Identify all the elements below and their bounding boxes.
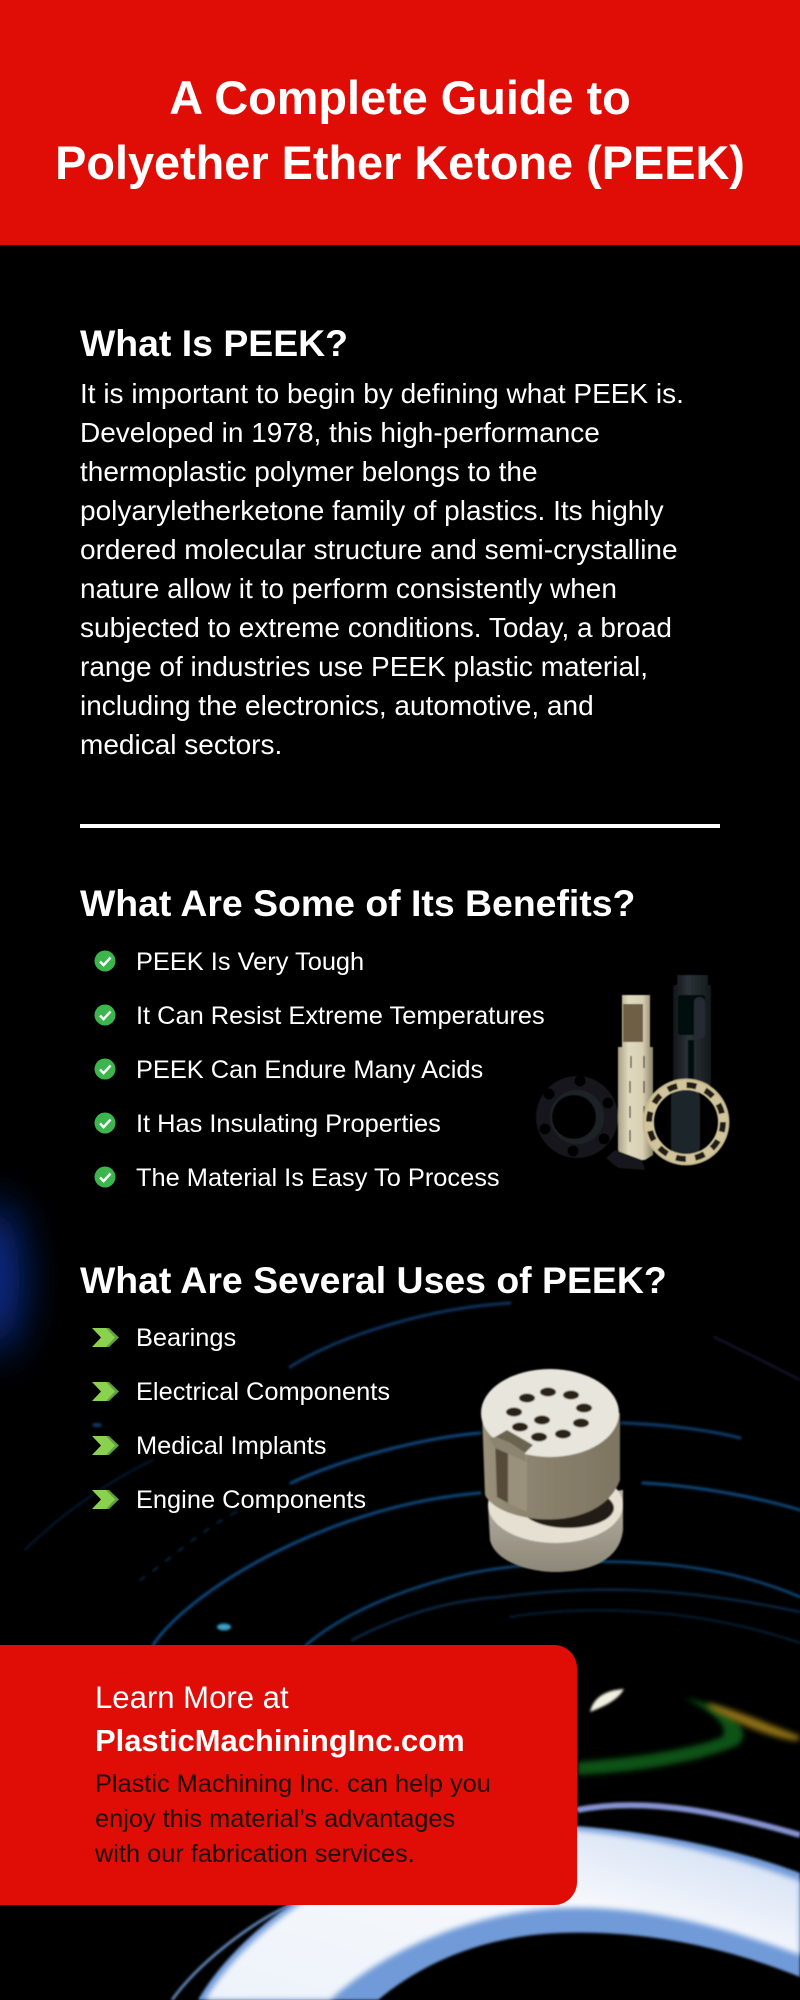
call to action card [0,1645,577,1905]
learn more label: Learn More at [95,1680,289,1715]
image: PEEK machined parts [536,974,730,1170]
paragraph: definition of PEEK [80,378,684,760]
uses list: Engine Components [136,1486,366,1514]
paragraph: definition of PEEK: nature allow it to perform consistently when [80,573,617,604]
benefits list: The Material Is Easy To Process [136,1164,500,1192]
benefits list: PEEK Is Very Tough [136,948,364,976]
paragraph: definition of PEEK: subjected to extreme conditions. Today, a broad [80,612,672,643]
paragraph: definition of PEEK: ordered molecular structure and semi-crystalline [80,534,678,565]
uses list: Electrical Components [136,1378,390,1406]
benefits list: PEEK Can Endure Many Acids [136,1056,483,1084]
uses list: Bearings [136,1324,236,1352]
title [55,72,745,189]
check icons [94,950,116,1188]
paragraph: definition of PEEK: range of industries use PEEK plastic material, [80,651,648,682]
description: Plastic Machining Inc. can help you [95,1770,491,1798]
heading: benefits: What Are Some of Its Benefits? [80,882,635,924]
description [95,1770,491,1868]
benefits list: It Has Insulating Properties [136,1110,441,1138]
paragraph: definition of PEEK: medical sectors. [80,729,282,760]
divider line [80,824,720,828]
chevron icons [92,1328,119,1509]
paragraph: definition of PEEK: thermoplastic polymer belongs to the [80,456,538,487]
paragraph: definition of PEEK: including the electronics, automotive, and [80,690,594,721]
description: enjoy this material’s advantages [95,1805,455,1833]
uses list: Medical Implants [136,1432,327,1460]
paragraph: definition of PEEK: polyaryletherketone family of plastics. Its highly [80,495,664,526]
benefits list [94,948,696,1192]
heading: what is PEEK: What Is PEEK? [80,322,348,364]
benefits list: It Can Resist Extreme Temperatures [136,1002,545,1030]
title: Polyether Ether Ketone (PEEK) [55,137,745,189]
paragraph: definition of PEEK: It is important to begin by defining what PEEK is. [80,378,684,409]
header banner [0,0,800,245]
description: with our fabrication services. [95,1840,415,1868]
uses list [92,1324,390,1514]
big white arc [172,1805,800,2000]
heading: uses: What Are Several Uses of PEEK? [80,1259,667,1301]
green and yellow reflections [577,1689,800,1775]
image: PEEK cylinder part [480,1368,624,1573]
website: PlasticMachiningInc.com [95,1723,465,1758]
title: A Complete Guide to [169,72,631,124]
paragraph: definition of PEEK: Developed in 1978, this high-performance [80,417,600,448]
